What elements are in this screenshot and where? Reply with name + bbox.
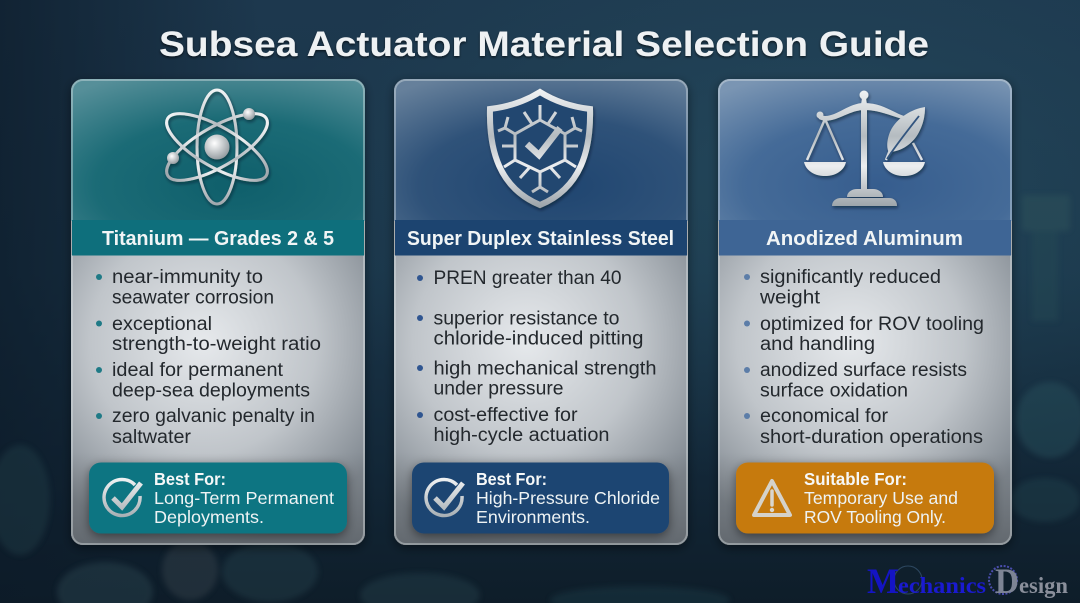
heading band: titanium — [72, 220, 364, 256]
callout: best for titanium: Best For: — [154, 469, 226, 489]
bullet list: titanium: near-immunity to — [112, 267, 263, 288]
title: Subsea Actuator Material Selection Guide — [159, 25, 929, 64]
bullet list: anodized aluminum: optimized for ROV tooling — [760, 314, 984, 335]
heading band: super duplex: Super Duplex Stainless Steel — [407, 228, 674, 250]
bullet list: anodized aluminum: anodized surface resists — [760, 360, 967, 381]
bullet list: super duplex: PREN greater than 40 — [434, 268, 622, 289]
heading band: titanium: Titanium — Grades 2 & 5 — [102, 228, 334, 250]
bullet list: anodized aluminum: weight — [759, 288, 821, 308]
bullet list: anodized aluminum: economical for — [760, 406, 889, 427]
callout: best for titanium: Deployments. — [154, 507, 264, 527]
bullet list: titanium: strength-to-weight ratio — [112, 334, 321, 355]
icon: shield — [490, 92, 590, 205]
watermark logo: esign — [1019, 573, 1068, 598]
bullet list: titanium: exceptional — [112, 314, 212, 335]
heading band: anodized aluminum: Anodized Aluminum — [766, 228, 963, 250]
icon: balance scale with feather — [804, 90, 925, 206]
bullet list: super duplex: chloride-induced pitting — [434, 328, 644, 350]
bullet list: anodized aluminum — [744, 267, 984, 448]
callout: best for titanium — [89, 462, 347, 534]
callout: suitable for anodized aluminum: ROV Tooling Only. — [804, 507, 946, 527]
bullet list: titanium: saltwater — [112, 427, 192, 448]
bullet list: titanium: ideal for permanent — [112, 360, 284, 381]
bullet list: anodized aluminum: and handling — [760, 334, 875, 355]
bullet list: anodized aluminum: surface oxidation — [760, 380, 908, 402]
callout: best for super duplex: Environments. — [476, 507, 590, 527]
bullet list: titanium: zero galvanic penalty in — [112, 406, 315, 427]
callout: best for super duplex — [412, 462, 669, 534]
bullet list: titanium: seawater corrosion — [112, 288, 274, 308]
callout: suitable for anodized aluminum: Suitable For: — [804, 469, 907, 489]
bullet list: super duplex: high mechanical strength — [434, 358, 656, 380]
watermark logo: echanics — [898, 573, 986, 598]
panel: anodized aluminum — [718, 79, 1012, 545]
callout: best for super duplex: High-Pressure Chloride — [476, 488, 660, 508]
watermark logo — [867, 561, 1068, 601]
heading band: super duplex — [395, 220, 687, 256]
bullet list: super duplex — [417, 268, 656, 446]
panel: titanium — [71, 79, 365, 545]
icon: atom — [158, 90, 276, 204]
bullet list: titanium — [96, 267, 321, 448]
heading band: anodized aluminum — [719, 220, 1011, 256]
bullet list: anodized aluminum: significantly reduced — [760, 267, 941, 288]
watermark logo: D — [995, 561, 1019, 601]
callout: suitable for anodized aluminum — [736, 462, 994, 534]
callout: best for super duplex: Best For: — [476, 469, 547, 489]
callout: suitable for anodized aluminum: Temporary Use and — [804, 488, 958, 508]
bullet list: titanium: deep-sea deployments — [112, 380, 310, 402]
bullet list: super duplex: high-cycle actuation — [434, 425, 610, 446]
watermark logo: M — [867, 561, 899, 601]
callout: best for titanium: Long-Term Permanent — [154, 488, 334, 508]
bullet list: super duplex: superior resistance to — [434, 308, 620, 330]
bullet list: super duplex: under pressure — [434, 378, 564, 400]
bullet list: anodized aluminum: short-duration operations — [760, 427, 983, 448]
panel: super duplex — [394, 79, 688, 545]
bullet list: super duplex: cost-effective for — [434, 405, 578, 426]
